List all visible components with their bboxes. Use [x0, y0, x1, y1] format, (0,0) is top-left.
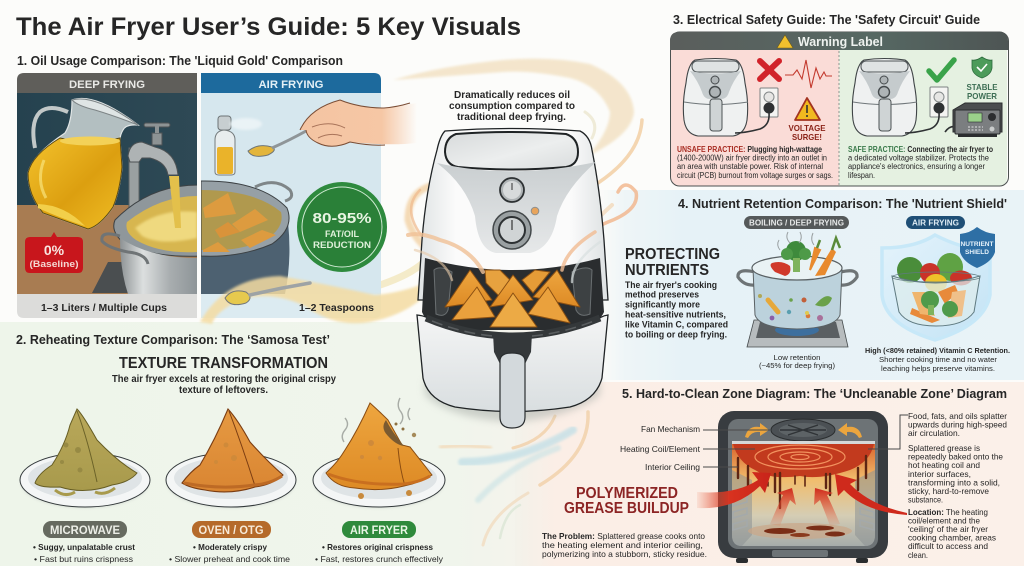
text: the problem: polymerizing into a stubborn, sticky residue. [542, 549, 707, 559]
header bar: air frying: AIR FRYING [258, 79, 324, 91]
deep frying scene background [17, 93, 197, 294]
pill: microwave [43, 521, 127, 538]
text: dramatic oil reduction: Dramatically reduces oil [454, 89, 570, 101]
text: location note [908, 507, 996, 560]
header bar: deep frying: DEEP FRYING [69, 79, 145, 91]
pill: air frying: AIR FRYING [912, 218, 959, 228]
icon: red cross [760, 61, 779, 79]
notes [33, 542, 135, 564]
panel: deep frying [17, 73, 197, 294]
air fryer samosa [313, 398, 445, 564]
outer casing [718, 411, 888, 558]
text: baked grease note: sticky, hard-to-remove [908, 486, 989, 496]
plate [313, 453, 445, 508]
salad greens and peppers [897, 253, 972, 292]
large glowing shield [882, 235, 990, 340]
text: splatter note: air circulation. [908, 428, 960, 438]
text: high retention [865, 346, 1010, 373]
notes: • Suggy, unpalatable crust [33, 542, 135, 552]
leached nutrients [758, 294, 832, 321]
text: safe practice: appliance's electronics, ensuring a longer [848, 162, 985, 171]
label: heating coil [620, 444, 755, 454]
text: dramatic oil reduction [449, 89, 575, 123]
basket cavity [422, 258, 604, 330]
steam [778, 232, 814, 250]
badge: 80-95% reduction: 80-95% [312, 210, 372, 227]
label: fan mechanism [641, 424, 770, 434]
notes [315, 542, 444, 564]
unsafe side background [671, 50, 839, 186]
callout: polymerized grease buildup: GREASE BUILDUP [564, 500, 689, 517]
pill: air frying [906, 216, 965, 229]
drop shadow [425, 380, 600, 422]
label: stable power: STABLE [966, 82, 998, 92]
header bar: air frying [201, 73, 381, 93]
label: voltage surge: SURGE! [792, 132, 822, 142]
unsafe plug and outlet [735, 88, 778, 133]
caption: air frying amount: 1–2 Teaspoons [299, 303, 374, 314]
icon: voltage spike line [785, 60, 832, 88]
pill: microwave: MICROWAVE [50, 525, 120, 537]
samosa [35, 409, 137, 491]
heading: protecting nutrients [625, 246, 720, 279]
small shield badge: SHIELD [965, 249, 989, 256]
text: baked grease note: repeatedly baked onto the [908, 452, 1003, 462]
vegetables above water [771, 238, 840, 276]
caption: deep frying amount: 1–3 Liters / Multiple Cups [41, 303, 167, 314]
notes: • Slower preheat and cook time [169, 554, 290, 564]
warning header: Warning Label [798, 34, 883, 49]
handle bracket [493, 333, 532, 364]
oven samosa [166, 409, 296, 564]
panel border [670, 32, 1008, 186]
red baseline badge [25, 232, 83, 273]
text: location note: coil/element and the [908, 516, 980, 526]
label: interior ceiling [645, 462, 738, 472]
text: location note: 'ceiling' of the air fryer [908, 524, 988, 534]
heading: section 2: 2. Reheating Texture Comparison: The ‘Samosa Test’ [16, 332, 330, 347]
text: baked grease note: interior surfaces, [908, 469, 971, 479]
wooden table [17, 205, 197, 294]
icon: green check [929, 60, 954, 80]
pot front across both panels [102, 73, 201, 318]
fan housing [771, 419, 835, 441]
icon: stable power shield [972, 57, 992, 78]
chamber interior [732, 444, 875, 546]
icon: faucet [128, 123, 178, 210]
text: nutrients explanation: method preserves [625, 290, 699, 300]
text: nutrients explanation: heat-sensitive nutrients, [625, 310, 726, 320]
badge: 80-95% reduction: REDUCTION [313, 240, 371, 251]
background: section 4 tint [600, 190, 1024, 380]
title: The Air Fryer User’s Guide: 5 Key Visuals [16, 13, 521, 41]
glass bowl [892, 276, 980, 326]
heading: texture transformation: TEXTURE TRANSFORMATION [119, 355, 328, 372]
caption background: deep frying [17, 294, 197, 318]
pot rim [752, 256, 842, 280]
red arrow: right sweep [835, 474, 907, 515]
inner frame [728, 419, 878, 549]
text: the problem: the heating element and interior ceiling, [542, 540, 703, 550]
notes: • Moderately crispy [193, 542, 267, 552]
text: the problem: The Problem: Splattered grease cooks onto [542, 531, 705, 541]
text: nutrients explanation [625, 280, 728, 340]
text: location note: cooking chamber, areas [908, 532, 996, 542]
steam inside fryer [408, 232, 600, 282]
safe fryer [852, 58, 917, 136]
icon: warning triangle [795, 98, 820, 120]
side wall shading [732, 470, 875, 546]
text: safe practice: a dedicated voltage stabilizer. Protects the [848, 154, 990, 162]
text: dramatic oil reduction: consumption compared to [449, 100, 575, 112]
vegetables in bowl [910, 285, 966, 323]
safe plug and outlet [905, 87, 956, 133]
label: interior ceiling: Interior Ceiling [645, 462, 700, 472]
plate [20, 453, 150, 508]
panel: air frying [201, 73, 417, 294]
icon: fry pot with food [201, 181, 292, 294]
text: unsafe practice: an area with unstable power. Risk of internal [677, 162, 823, 171]
heading: protecting nutrients: PROTECTING [625, 246, 720, 263]
samosa [182, 409, 283, 492]
text: high retention: High (<80% retained) Vitamin C Retention. [865, 346, 1010, 355]
gas stove [747, 320, 848, 347]
voltage stabilizer box [953, 103, 1002, 137]
caption background: air frying [201, 294, 381, 318]
text: high retention: Shorter cooking time and no water [879, 355, 998, 364]
small knob [500, 178, 524, 202]
text: low retention [759, 353, 836, 370]
pot handles [738, 271, 857, 285]
red arrow: lower left [770, 488, 796, 526]
badge: 80-95% reduction: FAT/OIL [325, 229, 359, 240]
drawer [417, 315, 608, 412]
drawer handle [500, 353, 525, 428]
text: dramatic oil reduction: traditional deep frying. [457, 111, 566, 123]
text: unsafe practice: circuit (PCB) burnout from voltage surges or sags. [677, 171, 833, 180]
red baseline badge: (Baseline) [30, 259, 78, 270]
pill: oven: OVEN / OTG [198, 525, 264, 537]
leader: coil bracket [868, 415, 908, 449]
bottom feet and handle [736, 550, 868, 563]
text: splatter note: Food, fats, and oils splatter [908, 411, 1007, 421]
pill: oven [192, 521, 271, 538]
text: nutrients explanation: significantly more [625, 300, 700, 310]
pill: air fryer [342, 521, 416, 538]
icon: hand with spoon [248, 100, 417, 156]
heading: section 1: 1. Oil Usage Comparison: The 'Liquid Gold' Comparison [17, 53, 343, 68]
heading: section 4: 4. Nutrient Retention Comparison: The 'Nutrient Shield' [678, 196, 1007, 211]
diagram: grease chamber [718, 411, 888, 563]
samosas in basket [445, 270, 580, 327]
label: fan mechanism: Fan Mechanism [641, 424, 700, 434]
air frying scene background [201, 93, 381, 294]
red baseline badge: 0% [44, 242, 65, 258]
text: texture description [112, 374, 336, 396]
text: nutrients explanation: The air fryer's cooking [625, 280, 717, 291]
label: voltage surge: VOLTAGE [788, 123, 826, 133]
callout: polymerized grease buildup: POLYMERIZED [576, 485, 678, 502]
label: stable power [966, 82, 998, 101]
notes: • Restores original crispness [322, 542, 433, 552]
text: safe practice: SAFE PRACTICE: Connecting the air fryer to [848, 145, 993, 154]
text: low retention: Low retention [774, 353, 820, 362]
red arrow: left sweep [697, 472, 771, 508]
text: nutrients explanation: like Vitamin C, compared [625, 320, 728, 330]
illustration: boiling pot [738, 232, 857, 347]
label: voltage surge [788, 123, 826, 142]
basket liner [434, 268, 452, 315]
badge: 80-95% reduction [297, 182, 387, 272]
text: safe practice: lifespan. [848, 171, 875, 180]
text: texture description: The air fryer excels at restoring the original crispy [112, 374, 336, 385]
text: low retention: (~45% for deep frying) [759, 361, 836, 370]
callout: polymerized grease buildup [564, 485, 689, 517]
unsafe fryer [683, 58, 748, 136]
text: nutrients explanation: to boiling or deep frying. [625, 330, 727, 340]
side racks [733, 496, 874, 530]
lid window [445, 132, 578, 170]
text: baked grease note: substance. [908, 494, 943, 504]
text: location note: clean. [908, 550, 928, 560]
icon: spray bottle [215, 116, 262, 175]
text: the problem [542, 531, 707, 559]
heading: section 5: 5. Hard-to-Clean Zone Diagram: The ‘Uncleanable Zone’ Diagram [622, 386, 1007, 401]
samosa [326, 403, 432, 490]
steam and crumbs [342, 398, 416, 499]
text: splatter note [908, 411, 1007, 438]
text: unsafe practice [677, 145, 833, 180]
text: splatter note: upwards during high-speed [908, 420, 1007, 430]
text: texture description: texture of leftovers. [179, 385, 268, 396]
heating coil [755, 445, 845, 469]
icon: oil pitcher [28, 98, 138, 229]
grease-stained ceiling [733, 444, 874, 477]
header bar: deep frying [17, 73, 197, 93]
microwave samosa [20, 409, 150, 564]
plate [166, 453, 296, 508]
small shield badge [960, 227, 995, 268]
background: section 5 tint [515, 382, 1024, 566]
basket rim with vents [426, 318, 600, 337]
text: baked grease note: hot heating coil and [908, 460, 980, 470]
text: baked grease note: transforming into a solid, [908, 478, 1000, 488]
red arrow: lower right [814, 488, 840, 526]
notes: • Fast, restores crunch effectively [315, 554, 444, 564]
text: location note: Location: The heating [908, 507, 988, 517]
notes: • Fast but ruins crispness [34, 554, 133, 564]
gold oil swoosh with spoon [200, 276, 440, 324]
fryer body [418, 128, 608, 300]
label: stable power: POWER [967, 91, 997, 101]
label: heating coil: Heating Coil/Element [620, 444, 701, 454]
icon: stove base [92, 262, 130, 293]
text: baked grease note [908, 443, 1003, 504]
illustration: nutrient shield bowl [882, 227, 995, 340]
panel: electrical safety [670, 32, 1008, 186]
text: baked grease note: Splattered grease is [908, 443, 980, 453]
large knob [493, 211, 531, 249]
text: location note: difficult to access and [908, 541, 988, 551]
background: section 2 tint [0, 322, 530, 566]
text: safe practice [848, 145, 993, 180]
notes [169, 542, 290, 564]
steam swooshes behind fryer [380, 59, 642, 545]
heading: protecting nutrients: NUTRIENTS [625, 262, 709, 279]
ceiling plate [732, 441, 875, 444]
floor grease pool [748, 523, 852, 539]
control panel [437, 162, 596, 253]
indicator light [531, 207, 539, 215]
heading: section 3: 3. Electrical Safety Guide: The 'Safety Circuit' Guide [673, 12, 980, 27]
airflow arrows [745, 423, 862, 438]
pill: boiling / deep frying: BOILING / DEEP FRYING [749, 218, 844, 228]
air fryer illustration [408, 128, 608, 428]
text: unsafe practice: (1400-2000W) air fryer directly into an outlet in [677, 154, 827, 162]
text: unsafe practice: UNSAFE PRACTICE: Plugging high-wattage [677, 145, 822, 154]
text: high retention: leaching helps preserve vitamins. [881, 364, 995, 373]
safe side background [839, 50, 1007, 186]
pill: air fryer: AIR FRYER [350, 525, 409, 537]
warning header [670, 32, 1008, 50]
small shield badge: NUTRIENT [960, 241, 994, 248]
pot body [753, 268, 842, 329]
grease drips [738, 456, 866, 508]
